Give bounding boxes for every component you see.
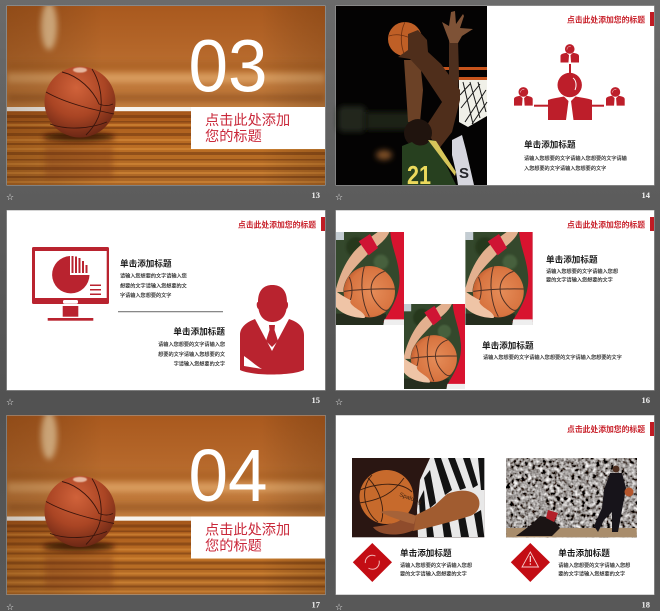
section title: 点击此处添加 [205,113,290,129]
divider [118,310,223,313]
text block [524,139,627,172]
header: 点击此处添加您的标题 [567,424,645,434]
icon: refresh diamond [353,543,392,582]
text block left: 要的文字请输入您想要的文字 [400,570,467,578]
photo: referee holding ball [352,458,484,537]
photo: ball hold 1 [336,232,404,325]
header accent bar [650,12,654,26]
text block: 请输入您想要的文字请输入您想要的文字请输 [524,154,627,162]
slide 18 panel [336,415,654,595]
slide 13 footer [6,190,320,203]
text block lower: 单击添加标题 [482,339,534,350]
photo: basketball on court [7,412,325,594]
text block lower: 单击添加标题 [173,326,225,337]
icon: monitor with pie chart [32,247,109,321]
text block right: 单击添加标题 [558,547,610,558]
photo: referee holding ball: Spalding [398,492,422,506]
text block upper: 想要的文字请输入您想要的文 [120,282,187,290]
header: 点击此处添加您的标题 [567,14,645,24]
section title: 您的标题 [205,128,262,145]
photo: player dunking: S [459,165,469,182]
header accent bar [650,422,654,436]
text block right [558,547,630,578]
slide 14 footer [335,190,651,203]
slide 13 footer: 13 [312,190,320,200]
text block upper: 字请输入您想要的文字 [120,291,171,299]
text block lower: 请输入您想要的文字请输入您 [158,340,225,348]
slide 17 panel [6,412,326,595]
section number 04: 04 [188,434,268,517]
slide 18 footer: 18 [642,600,650,610]
photo: ball hold 3 [465,232,533,325]
photo: player dunking [336,6,487,190]
photo: game in front of crowd [506,458,637,537]
section title: 点击此处添加 [205,522,290,538]
slide 16 footer: ☆ [335,398,343,408]
text block left [400,547,472,578]
text block upper: 请输入您想要的文字请输入您想 [546,267,618,275]
slide 15 footer [6,395,320,408]
slide 15 panel [6,210,326,390]
icon: people network [514,44,625,120]
text block: 单击添加标题 [524,139,576,150]
text block lower: 字请输入您想要的文字 [174,360,225,368]
photo: basketball on court [7,2,325,185]
slide 15 footer: ☆ [6,398,14,408]
slide 16 footer [335,395,650,408]
slide 14 footer: 14 [642,190,651,200]
text block upper [546,253,618,284]
text block right: 要的文字请输入您想要的文字 [558,570,625,578]
slide 14 panel [336,6,654,190]
slide 16 panel [336,210,654,390]
text block lower: 想要的文字请输入您想要的文 [158,350,225,358]
slide 17 footer: 17 [312,600,321,610]
text block upper: 单击添加标题 [120,258,172,269]
header: 点击此处添加您的标题 [238,220,316,230]
slide 14 footer: ☆ [335,193,343,203]
text block: 入您想要的文字请输入您想要的文字 [524,164,606,172]
text block upper [120,258,187,299]
text block upper: 请输入您想要的文字请输入您 [120,272,187,280]
text block right: 请输入您想要的文字请输入您想 [558,561,630,569]
header: 点击此处添加您的标题 [567,220,645,230]
text block upper: 要的文字请输入您想要的文字 [546,276,613,284]
slide 16 footer: 16 [642,395,650,405]
white title band [191,107,325,149]
text block lower [158,326,225,368]
white title band [191,516,325,558]
header accent bar [650,217,654,231]
section number 03: 03 [188,24,268,108]
text block upper: 单击添加标题 [546,253,598,264]
photo: ball hold 2 [404,304,465,389]
slide 13 panel [6,2,326,186]
section title [205,113,290,145]
slide 13 footer: ☆ [6,193,14,203]
section title [205,522,290,554]
photo: player dunking: 21 [407,160,431,190]
icon: businessman [240,285,304,374]
slide 18 footer [335,600,650,611]
slide 15 footer: 15 [312,395,320,405]
text block lower: 请输入您想要的文字请输入您想要的文字请输入您想要的文字 [483,353,622,361]
icon: warning diamond [511,543,550,582]
header accent bar [321,217,325,231]
section title: 您的标题 [205,538,262,554]
slide 17 footer [6,600,321,611]
text block left: 请输入您想要的文字请输入您想 [400,561,472,569]
text block left: 单击添加标题 [400,547,452,558]
text block lower [482,339,622,361]
